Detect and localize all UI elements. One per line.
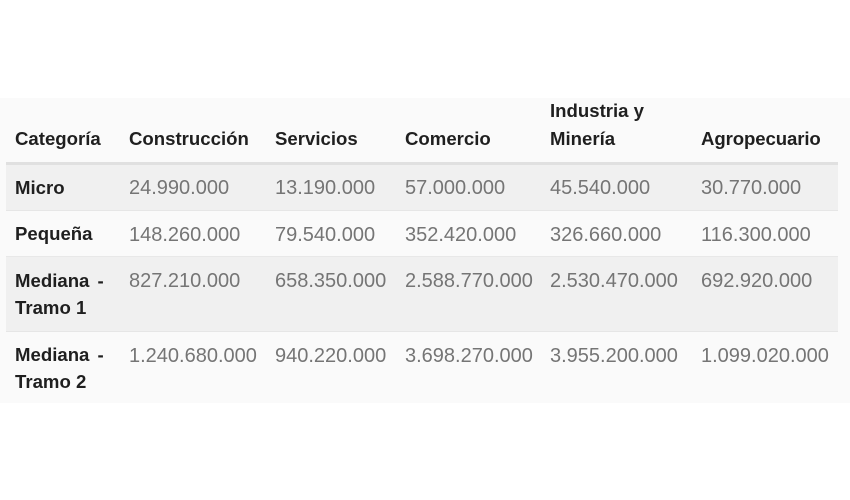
label: Micro: Micro [15,177,65,198]
value: 57.000.000 [405,177,505,199]
header: Industria y Minería: Minería [550,128,615,148]
value: 3.955.200.000 [550,345,678,367]
label: Mediana - Tramo 2: Mediana - [15,344,104,365]
value: 940.220.000 [275,345,386,367]
value: 827.210.000 [129,270,240,292]
value: 352.420.000 [405,224,516,246]
value: 1.240.680.000 [129,345,257,367]
value: 692.920.000 [701,270,812,292]
row background: Micro [6,162,838,211]
row background: Mediana Tramo 1 [6,256,838,332]
header: Comercio: Comercio [405,128,491,149]
value: 13.190.000 [275,177,375,199]
label: Mediana - Tramo 2 [15,344,104,392]
value: 3.698.270.000 [405,345,533,367]
label: Mediana - Tramo 1: Tramo 1 [15,297,86,318]
value: 2.530.470.000 [550,270,678,292]
value: 30.770.000 [701,177,801,199]
header: Servicios: Servicios [275,128,358,149]
row: Mediana Tramo 1 [15,270,812,318]
row: Mediana Tramo 2 [15,344,829,392]
label: Mediana - Tramo 1 [15,270,104,318]
header row [15,100,821,149]
label: Pequeña: Pequeña [15,223,92,244]
value: 1.099.020.000 [701,345,829,367]
header: Industria y Minería [550,100,644,148]
label: Mediana - Tramo 2: Tramo 2 [15,371,86,392]
value: 79.540.000 [275,224,375,246]
value: 326.660.000 [550,224,661,246]
value: 2.588.770.000 [405,270,533,292]
header: Industria y Minería: Industria y [550,100,644,121]
header: Agropecuario: Agropecuario [701,128,821,149]
value: 24.990.000 [129,177,229,199]
value: 148.260.000 [129,224,240,246]
value: 45.540.000 [550,177,650,199]
table panel [0,98,850,403]
row: Pequeña [15,223,811,246]
value: 116.300.000 [701,224,811,246]
value: 658.350.000 [275,270,386,292]
label: Mediana - Tramo 1: Mediana - [15,270,104,291]
header: Categoría: Categoría [15,128,101,149]
row: Micro [15,177,801,199]
header: Construcción: Construcción [129,128,249,149]
